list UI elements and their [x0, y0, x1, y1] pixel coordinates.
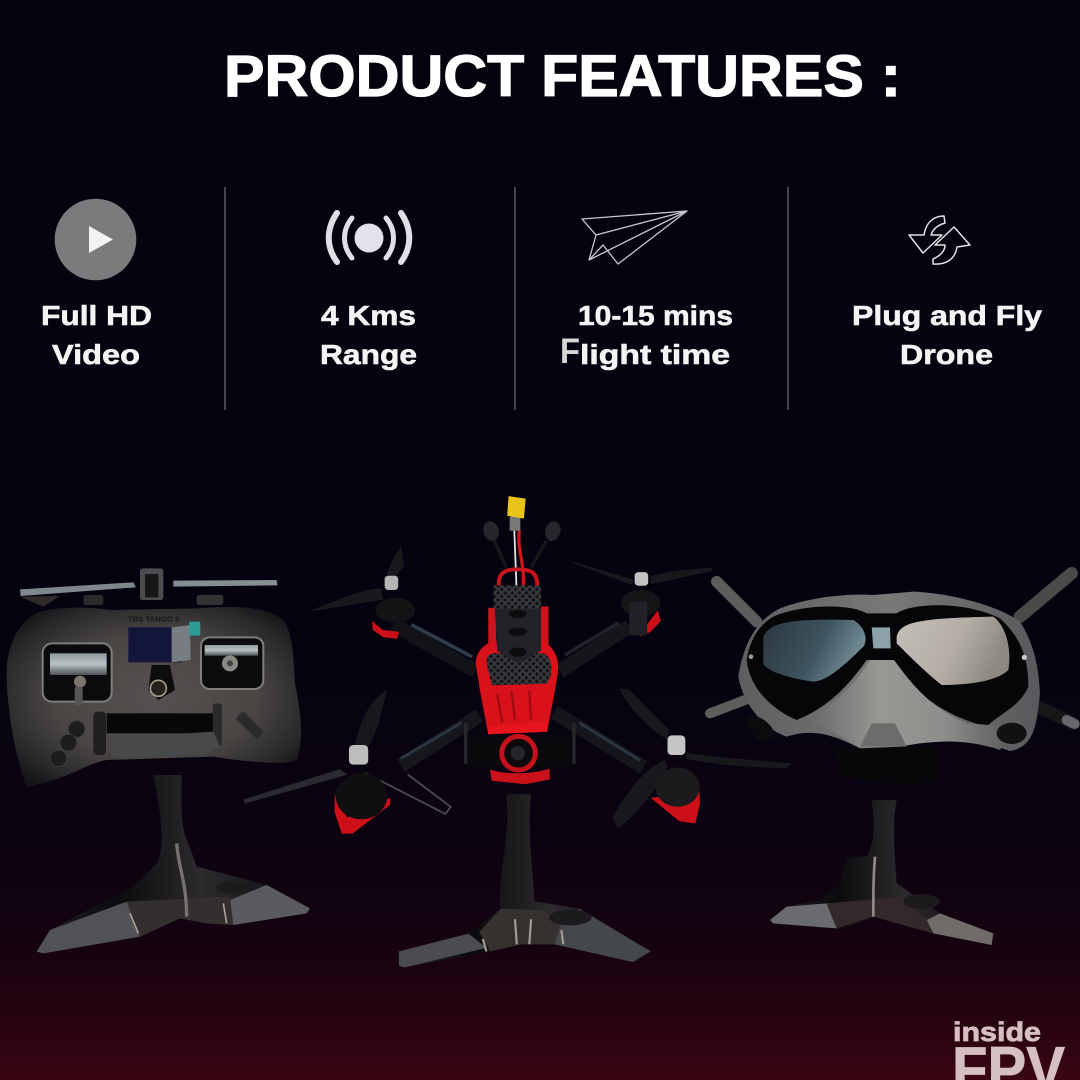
label: full hd video: Video	[52, 339, 140, 370]
label: plug and fly drone	[852, 300, 1042, 370]
icon: paper plane	[582, 211, 687, 264]
label: 4 kms range	[320, 300, 417, 370]
stand	[399, 794, 651, 967]
product: fpv goggles on stand	[710, 573, 1075, 945]
left gimbal	[43, 643, 112, 705]
brand label: TBS TANGO II	[128, 615, 179, 624]
title: PRODUCT FEATURES :	[224, 44, 901, 109]
label: flight time	[560, 300, 733, 371]
label: plug and fly drone: Drone	[900, 339, 993, 370]
main frame	[476, 569, 558, 734]
goggles side details	[746, 654, 1027, 744]
icon: broadcast signal	[329, 213, 409, 262]
goggles black recess	[747, 605, 1028, 727]
prop loop	[365, 773, 451, 814]
nose bridge	[872, 627, 891, 648]
antennas	[710, 573, 1075, 724]
logo	[952, 1017, 1065, 1080]
transmitter body	[7, 607, 301, 787]
right gimbal	[201, 637, 263, 689]
logo: inside	[953, 1017, 1041, 1047]
icon: play button	[55, 199, 136, 280]
camera and cage	[466, 723, 574, 784]
propellers	[244, 547, 791, 827]
label: full hd video	[41, 300, 152, 370]
label: full hd video: Full HD	[41, 300, 152, 331]
lens left	[763, 620, 866, 682]
side buttons	[50, 711, 264, 767]
label: plug and fly drone: Plug and Fly	[852, 300, 1042, 331]
mount	[835, 747, 938, 785]
phone holder	[93, 703, 222, 758]
feature: plug and fly	[852, 216, 1042, 370]
label: flight time: light time	[580, 339, 730, 370]
stand	[37, 775, 310, 953]
center knob	[148, 665, 175, 700]
label: flight time: F	[560, 332, 580, 371]
red motor guards	[335, 610, 700, 834]
feature: flight time	[560, 211, 733, 371]
screen	[128, 622, 200, 662]
stand	[770, 800, 993, 945]
lens right	[897, 617, 1009, 685]
label: 4 kms range: Range	[320, 339, 417, 370]
antennas and handle	[20, 568, 277, 607]
product: fpv drone on stand	[244, 496, 791, 967]
goggles body	[738, 592, 1040, 751]
label: flight time: 10-15 mins	[578, 300, 733, 331]
feature: full hd video	[41, 199, 152, 370]
motors and hubs	[336, 572, 700, 819]
panel: feature row	[41, 187, 1042, 410]
antennas	[481, 519, 563, 567]
icon: swap arrows	[909, 216, 970, 264]
battery lead	[507, 496, 526, 587]
feature: 4 kms range	[320, 213, 417, 370]
arms	[394, 623, 644, 767]
label: 4 kms range: 4 Kms	[321, 300, 416, 331]
nose guard	[798, 660, 1007, 750]
product: radio transmitter on stand	[7, 568, 310, 953]
